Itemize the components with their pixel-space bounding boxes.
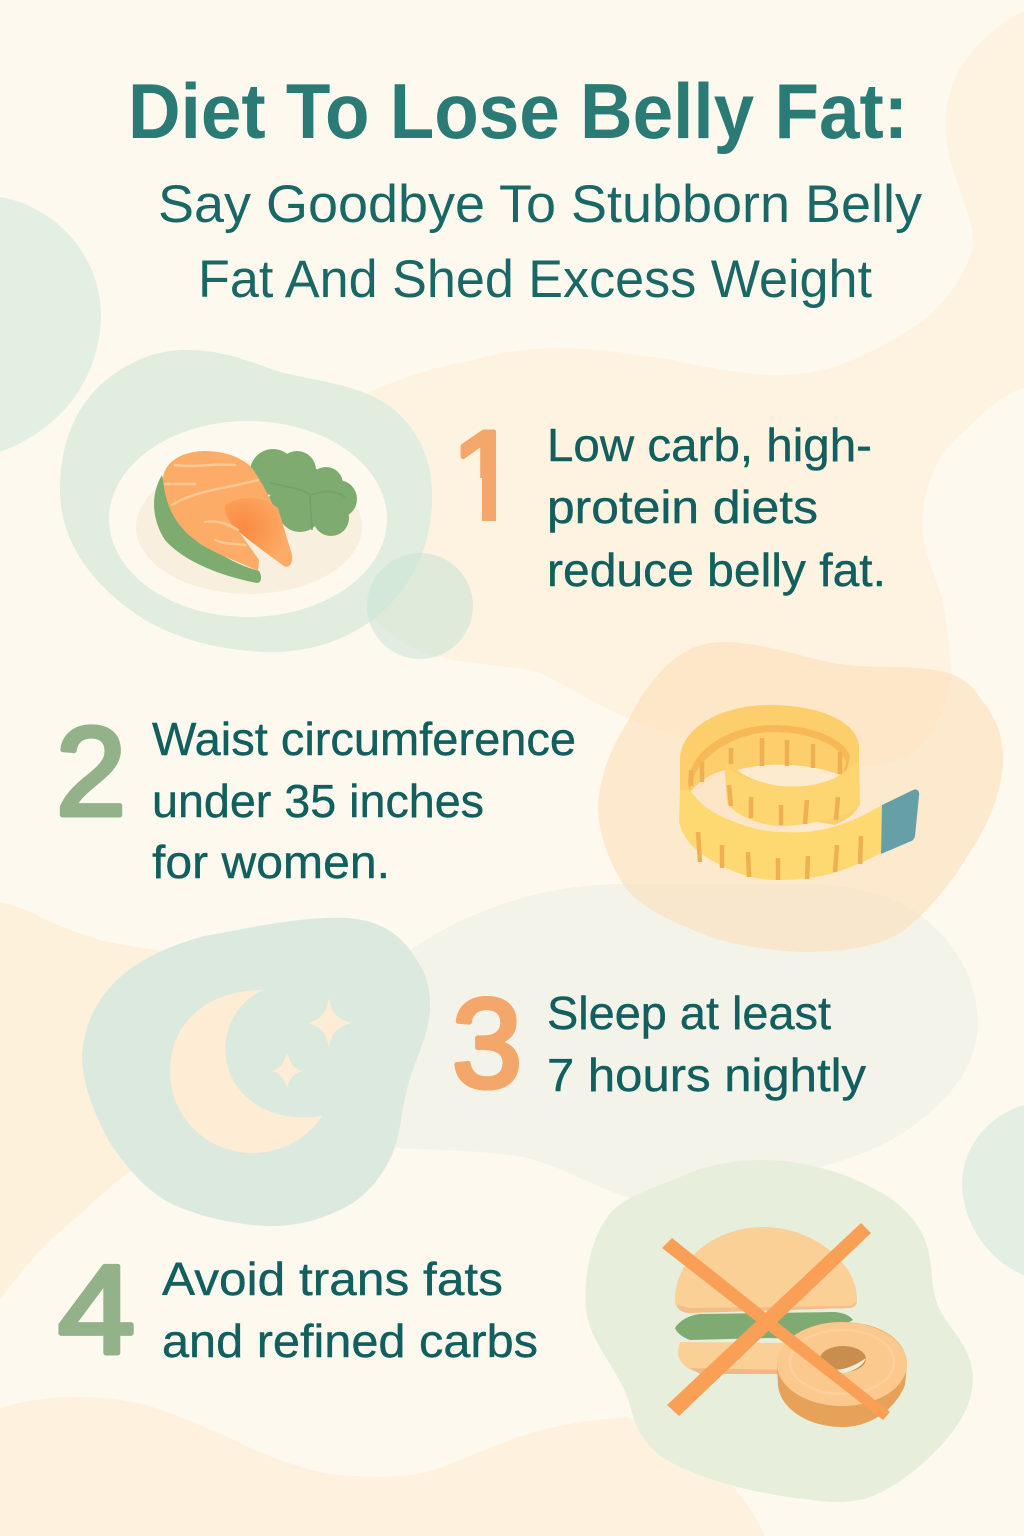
number 2: 2 [56, 701, 126, 842]
text: item 2: under 35 inches [152, 775, 484, 827]
number 1: 1 [451, 405, 521, 546]
text: item 1: reduce belly fat. [547, 544, 886, 596]
number 3: 3 [452, 973, 522, 1114]
icon: moon and stars [82, 918, 430, 1226]
text: item 2: for women. [152, 836, 390, 888]
text: item 1: protein diets [547, 481, 818, 533]
text: item 4: and refined carbs [162, 1315, 538, 1367]
icon: measuring tape [598, 642, 1003, 952]
panel: item 4 avoid trans fats [58, 1160, 973, 1502]
title: Say Goodbye To Stubborn Belly [158, 175, 922, 234]
number 4: 4 [58, 1239, 135, 1380]
title [128, 67, 922, 309]
title: Diet To Lose Belly Fat: [128, 67, 908, 155]
text: item 3 [547, 987, 866, 1101]
text: item 3: 7 hours nightly [547, 1049, 866, 1101]
title: Fat And Shed Excess Weight [198, 250, 872, 309]
panel: item 1 low carb high protein [60, 350, 886, 659]
text: item 1: Low carb, high- [547, 419, 872, 471]
panel: item 3 sleep [82, 918, 866, 1226]
icon: salmon on a plate [60, 350, 473, 659]
text: item 3: Sleep at least [547, 987, 831, 1039]
text: item 2: Waist circumference [152, 713, 576, 765]
text: item 4 [162, 1253, 538, 1367]
icon: crossed out burger and donut [585, 1160, 973, 1502]
text: item 4: Avoid trans fats [162, 1253, 503, 1305]
panel: item 2 waist circumference [56, 642, 1003, 952]
text: item 1 [547, 419, 886, 596]
text: item 2 [152, 713, 576, 888]
